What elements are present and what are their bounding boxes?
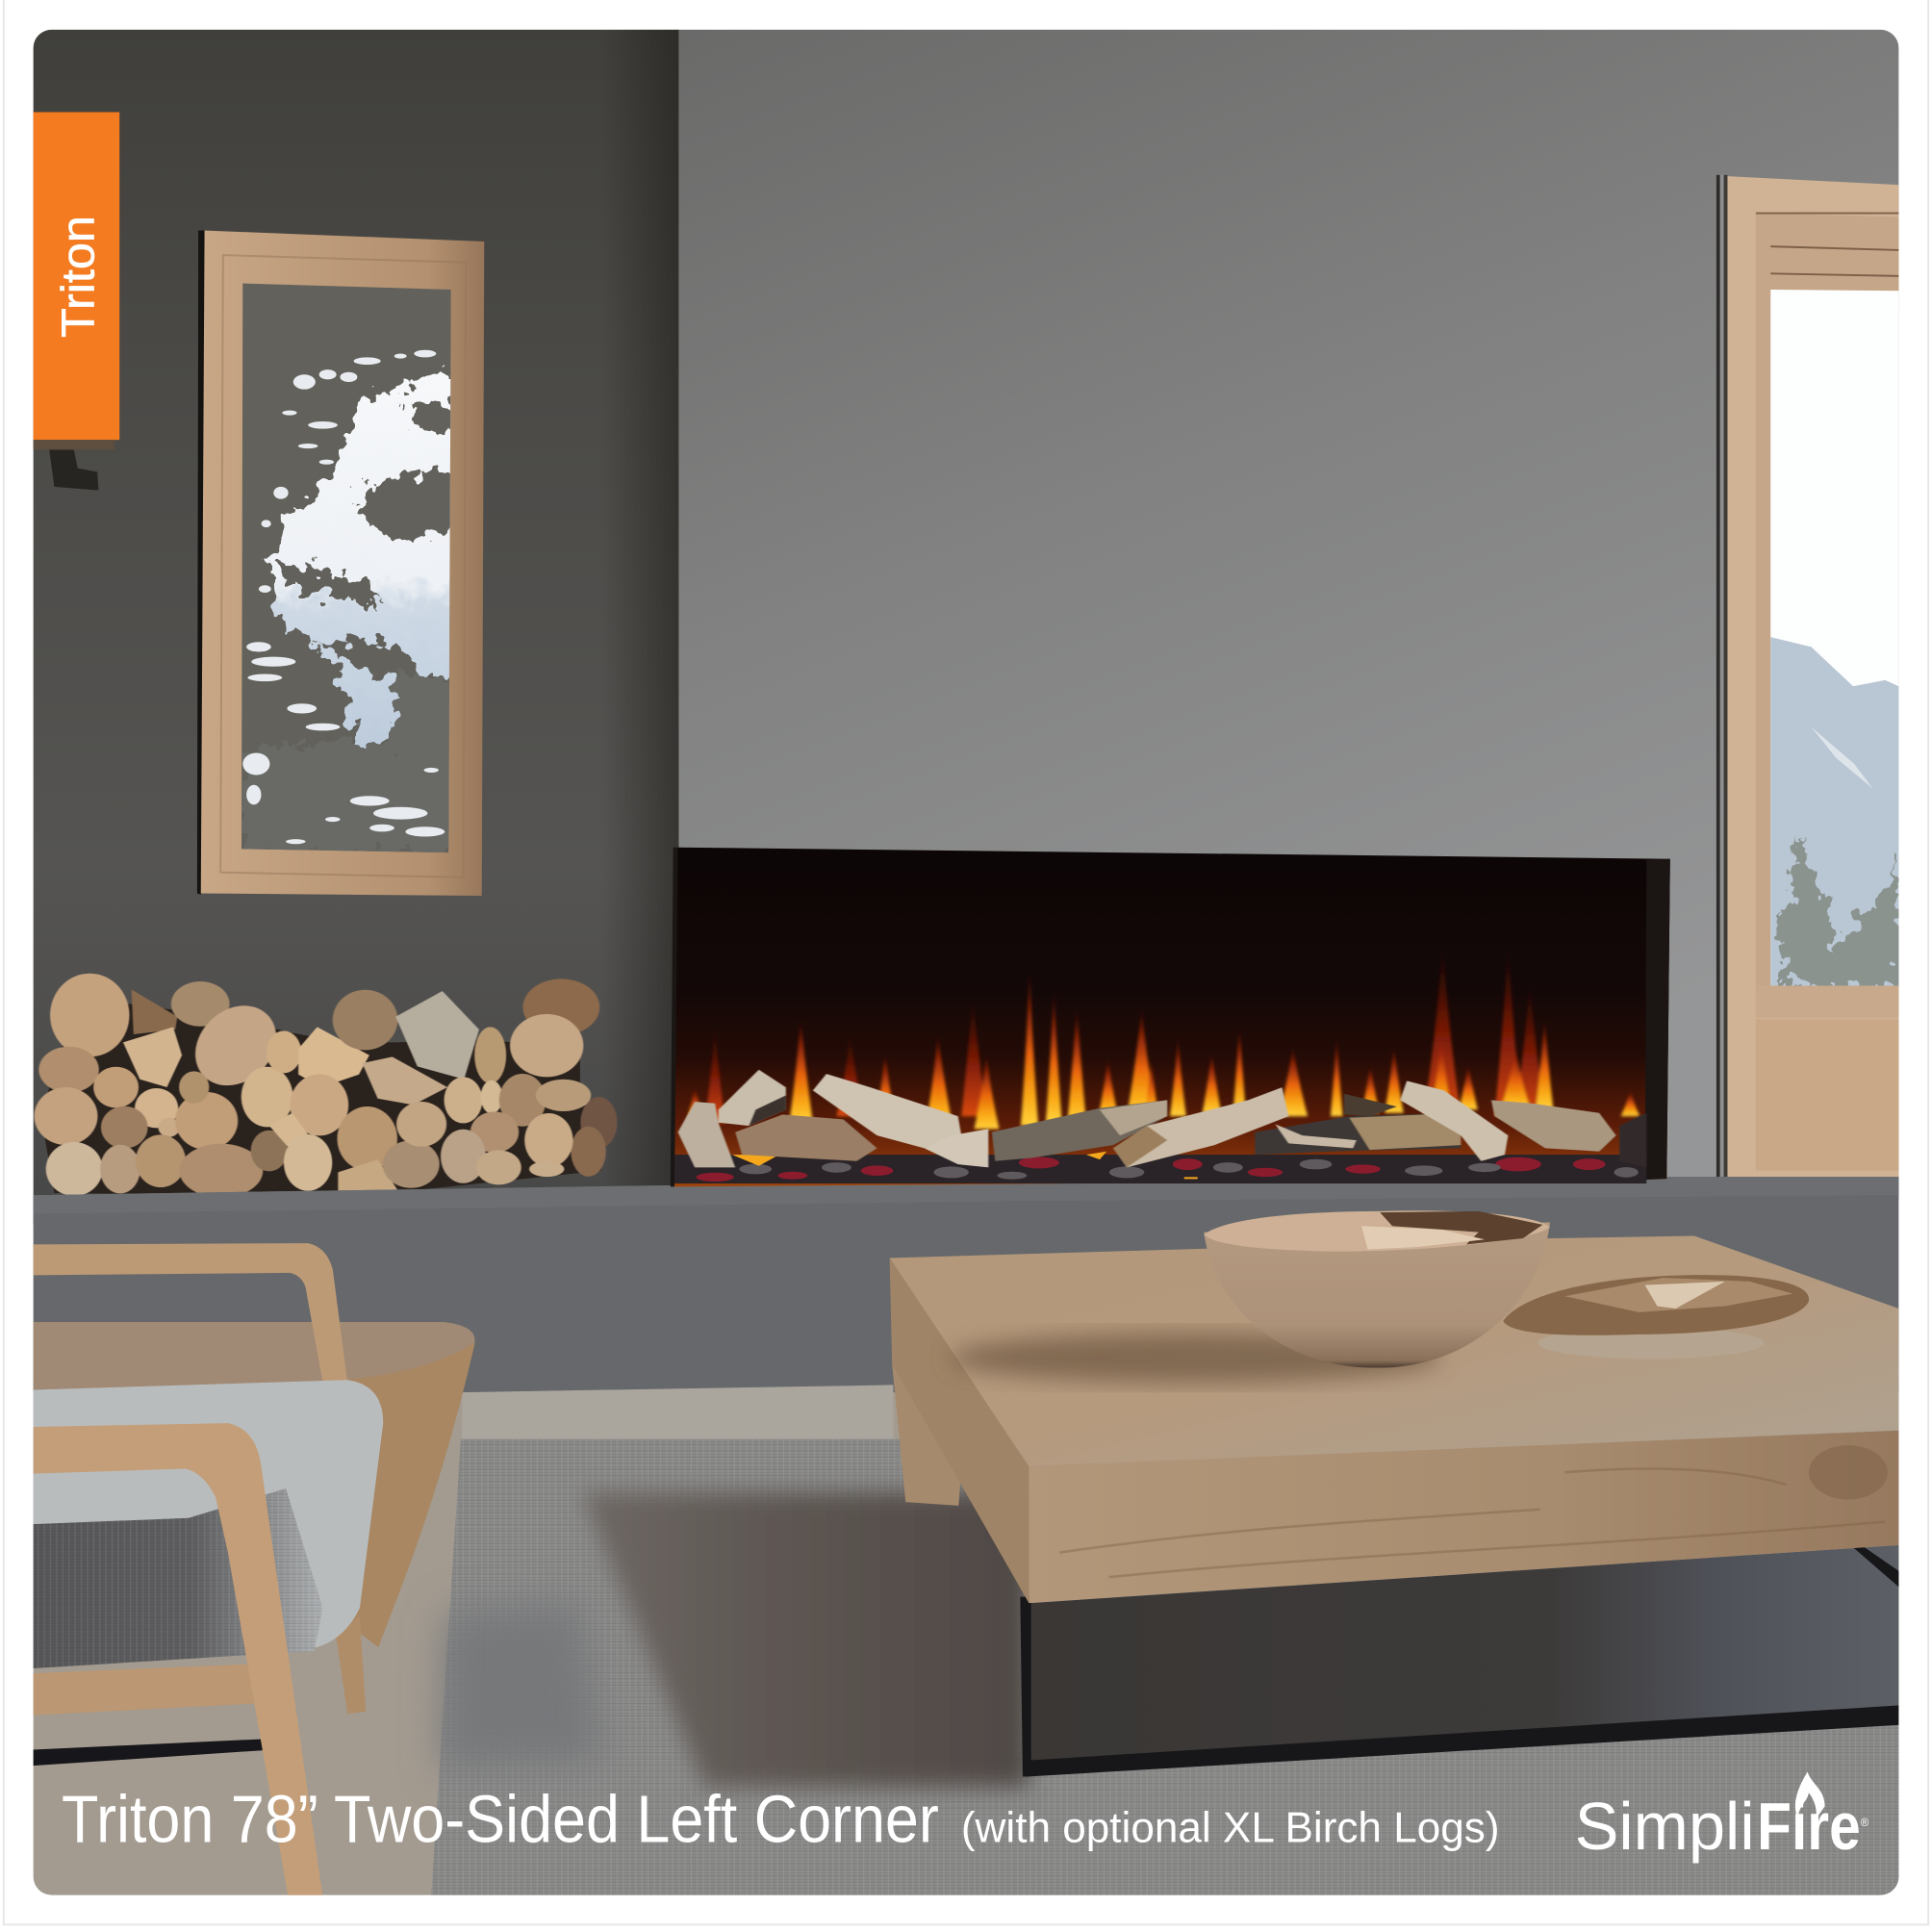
tree branches [281,400,462,690]
product subtitle: (with optional XL Birch Logs) [961,1804,1500,1852]
logs [678,1070,1646,1167]
chimney wall [679,30,1898,1200]
coffee table [890,1235,1898,1777]
door track lines [1716,175,1727,1178]
SimpliFire logo: ® [1861,1818,1869,1829]
table shadow under bowl [949,1334,1441,1383]
SimpliFire logo [1575,1772,1869,1864]
chair rear leg [335,1616,366,1714]
table block leg [892,1364,961,1506]
stacked firewood [35,974,618,1198]
hearth ledge [34,1177,1898,1392]
fireplace left jamb [671,848,678,1186]
table metal base [1020,1546,1898,1777]
chair back arm [34,1243,347,1383]
rug [431,1439,1898,1895]
logo flame [1795,1772,1825,1818]
rug shadow from table [581,1492,1029,1787]
plate [1503,1275,1809,1360]
floor [34,1380,1898,1897]
shadow under table [1031,1545,1898,1761]
floor planks [462,1385,893,1444]
door frame [1727,176,1898,1178]
wooden bowl [1204,1210,1550,1368]
chair rail [34,1664,268,1716]
door window view [1770,290,1898,985]
product title: Triton 78” Two-Sided Left Corner [62,1782,939,1857]
left window [197,230,484,896]
armchair [34,1243,383,1897]
table side [890,1258,1029,1603]
left wall [34,30,679,1225]
door pine trees [1778,838,1898,985]
tab label: Triton [52,216,104,338]
fireplace embers bed [674,1152,1646,1183]
fireplace [671,848,1670,1186]
flames [687,943,1640,1129]
window view: sky and tree [234,277,462,856]
door lower panel [1770,985,1899,1018]
chair front arm [34,1423,323,1897]
table front face [1029,1431,1898,1603]
side stool [34,1322,474,1647]
chair seat texture [34,1488,323,1668]
tree highlights [242,350,445,844]
window frame [199,230,484,896]
wall sconce [49,449,98,491]
firewood shadow [41,1004,609,1195]
SimpliFire logo: Simpli [1575,1789,1755,1864]
table top [890,1235,1898,1466]
orange category tab [34,113,119,449]
rug dark patch [441,1602,604,1768]
SimpliFire logo: Fire [1757,1789,1861,1864]
firebox interior [674,848,1670,1186]
chair cushion [34,1380,383,1668]
right door with window [1716,175,1898,1178]
